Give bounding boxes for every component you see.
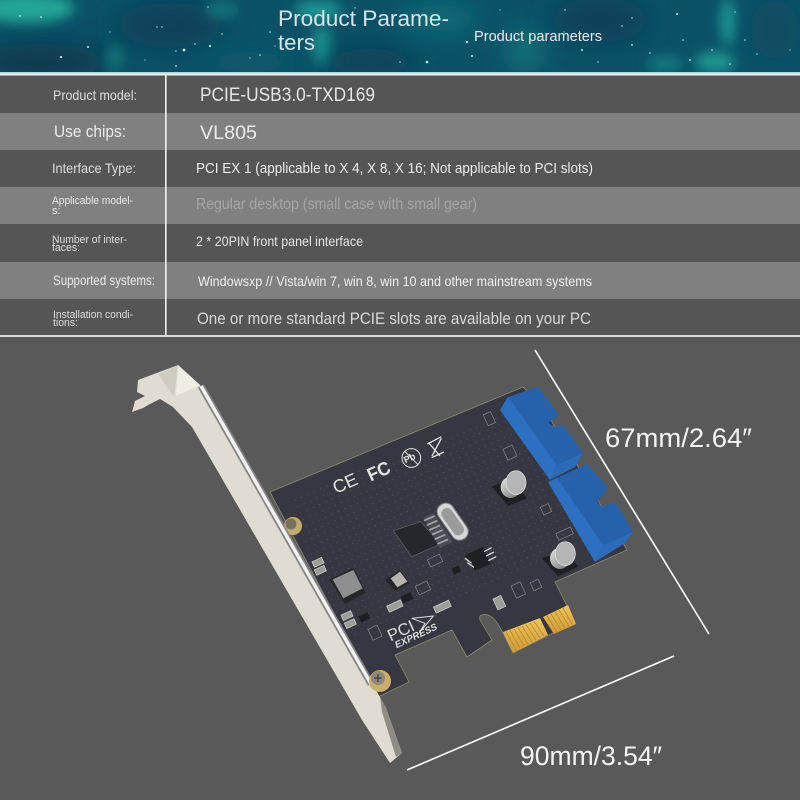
- certification marks: FC: [364, 457, 394, 485]
- banner title: ters: [278, 30, 315, 55]
- silver rail: [201, 386, 371, 684]
- certification marks: [329, 437, 444, 498]
- row: product model: PCIE-USB3.0-TXD169: [200, 85, 375, 106]
- PCI Express logo: PCI: [384, 616, 418, 645]
- row: product model: [0, 76, 800, 113]
- metal bracket: [132, 365, 402, 763]
- board details drawn in zoomed coordinates: [312, 412, 578, 651]
- row: supported systems: [0, 262, 800, 299]
- dimension label: 90mm: 90mm/3.54″: [520, 741, 662, 771]
- row: applicable models: [0, 187, 800, 224]
- small inductor: [385, 570, 409, 591]
- mounting screw bottom: [369, 670, 391, 692]
- dimension label: 67mm: 67mm/2.64″: [605, 423, 752, 453]
- banner title: [278, 6, 449, 55]
- row: number of interfaces: 2 * 20PIN front panel interface: [196, 233, 363, 249]
- banner subtitle: Product parameters: [474, 28, 602, 45]
- dimension line: length: [407, 656, 674, 770]
- controller chip: [393, 513, 453, 557]
- parameter table: [0, 75, 800, 337]
- row: interface type: [0, 150, 800, 187]
- row: number of interfaces: Number of inter-: [52, 234, 127, 246]
- capacitor 1: [492, 471, 527, 506]
- banner title: Product Parame-: [278, 6, 449, 31]
- gold edge connectors: [503, 605, 576, 653]
- row: interface type: PCI EX 1 (applicable to X 4, X 8, X 16; Not applicable to PCI slots): [196, 160, 593, 177]
- row: product model: Product model:: [53, 87, 137, 103]
- row: chips: [0, 113, 800, 150]
- surface mount parts: [312, 557, 506, 629]
- PCIe expansion card: [132, 365, 633, 763]
- row: installation conditions: Installation condi-: [53, 309, 133, 321]
- circuit board: [270, 387, 627, 697]
- row: applicable models: Applicable model-: [52, 195, 133, 207]
- row: applicable models: s:: [52, 205, 61, 217]
- row: supported systems: Supported systems:: [53, 272, 155, 288]
- row: installation conditions: tions:: [53, 317, 78, 329]
- row: supported systems: Windowsxp // Vista/win 7, win 8, win 10 and other mainstream systems: [198, 273, 592, 289]
- row: chips: VL805: [200, 123, 257, 144]
- row: interface type: Interface Type:: [52, 160, 136, 176]
- PCI Express logo: EXPRESS: [393, 622, 440, 651]
- blue header connector 2: [548, 464, 633, 562]
- capacitor 2: [542, 542, 578, 576]
- small IC: [465, 547, 496, 571]
- row: installation conditions: [0, 299, 800, 335]
- header banner: teal starfield: [0, 0, 800, 80]
- row: applicable models: Regular desktop (small case with small gear): [196, 196, 477, 213]
- row: number of interfaces: [0, 224, 800, 262]
- dimension line: width: [535, 350, 709, 634]
- row: number of interfaces: faces:: [52, 242, 80, 254]
- row: chips: Use chips:: [54, 122, 126, 141]
- crystal oscillator: [434, 500, 472, 544]
- silkscreen footprints: [368, 412, 573, 640]
- PCI Express logo: [384, 616, 440, 651]
- certification marks: CE: [329, 469, 361, 498]
- certification marks: Pb: [402, 451, 417, 465]
- inductor: [329, 568, 366, 604]
- blue header connector 1: [500, 387, 583, 480]
- row: installation conditions: One or more standard PCIE slots are available on your PC: [197, 309, 591, 328]
- mounting screw top: [284, 517, 302, 535]
- stars: [19, 6, 791, 67]
